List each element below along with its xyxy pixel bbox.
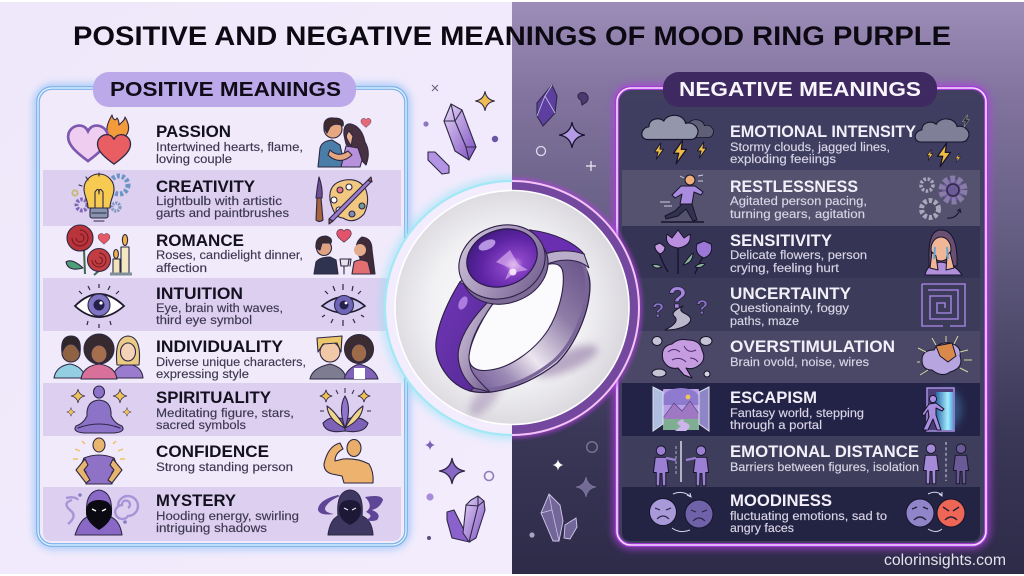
- row: overstimulation: OVERSTIMULATION: [730, 338, 895, 356]
- row: emotional intensity: exploding feeiings: [730, 152, 836, 166]
- icon: sad faces cycling: [650, 492, 713, 532]
- row: uncertainty: [652, 280, 965, 330]
- row: restlessness: Agitated person pacing,: [730, 194, 867, 208]
- row: escapism: Fantasy world, stepping: [730, 406, 864, 420]
- row: escapism: [653, 387, 962, 432]
- row: confidence: Strong standing person: [156, 460, 293, 474]
- icon: couple at candlelight dinner: [314, 229, 375, 274]
- decorations: bottom left crystals and sparkles: [425, 440, 494, 542]
- icon: question marks and foggy path: ?: [668, 280, 687, 315]
- frame highlight: positive: [38, 88, 406, 545]
- row: restlessness: RESTLESSNESS: [730, 178, 858, 196]
- icon: storm clouds and lightning: [642, 115, 714, 164]
- icon: delicate flowers: [652, 230, 712, 274]
- icon: third eye: [75, 284, 124, 328]
- icon: question marks and foggy path: ?: [696, 297, 708, 319]
- band silhouette: [436, 230, 590, 392]
- icon: person crying: [925, 230, 962, 275]
- icon: figures with barrier: [653, 441, 709, 486]
- heading pill: negative meanings: NEGATIVE MEANINGS: [679, 78, 921, 101]
- title: POSITIVE AND NEGATIVE MEANINGS OF MOOD RING PURPLE: [73, 21, 951, 51]
- icon: question marks and foggy path: ?: [652, 300, 664, 322]
- background: left half: [0, 2, 512, 574]
- band highlight: [456, 295, 470, 311]
- icon: separated figures: [923, 442, 969, 484]
- panel: negative meanings: [617, 72, 986, 545]
- row: spirituality: SPIRITUALITY: [156, 389, 271, 407]
- row: restlessness: turning gears, agitation: [730, 207, 865, 221]
- row: passion: PASSION: [156, 123, 231, 141]
- icon: brain with speech bubbles: [652, 336, 712, 378]
- icon: palette and brushes: [316, 177, 372, 224]
- back silver strip: [545, 251, 589, 268]
- row: emotional distance: Barriers between figures, isolation: [730, 460, 919, 474]
- row: intuition: INTUITION: [156, 285, 243, 303]
- icon: intertwined hearts and flame: [68, 115, 131, 164]
- icon: roses and candles: [66, 225, 132, 275]
- icon: maze: [922, 284, 965, 326]
- row bands: positive: [43, 170, 401, 541]
- panel interior: negative: [617, 88, 986, 545]
- frame highlight: negative: [617, 88, 986, 545]
- row: creativity: [72, 173, 372, 224]
- white disc: [395, 190, 629, 424]
- icon: dark hooded figure: [318, 490, 383, 535]
- row bands: negative: [622, 100, 980, 541]
- icon: blonde man and woman: [310, 334, 378, 379]
- front purple band: [436, 282, 490, 391]
- row: individuality: Diverse unique characters,: [156, 355, 306, 369]
- glow: purple right side: [512, 176, 645, 441]
- row: uncertainty: UNCERTAINTY: [730, 285, 851, 303]
- row: overstimulation: [652, 336, 972, 378]
- row: creativity: Lightbulb with artistic: [156, 194, 282, 208]
- medallion backing right: [512, 182, 638, 434]
- row: creativity: garts and paintbrushes: [156, 206, 289, 220]
- row: passion: Intertwined hearts, flame,: [156, 140, 303, 154]
- icon: loving couple: [318, 118, 371, 167]
- frame line left: [384, 180, 512, 436]
- row: spirituality: Meditating figure, stars,: [156, 406, 294, 420]
- icon: meditating figure and stars: [67, 386, 131, 433]
- icon: turning gears: [921, 179, 964, 218]
- row: emotional intensity: [642, 115, 970, 167]
- row: overstimulation: Brain ovold, noise, wires: [730, 355, 869, 369]
- heading pill: positive meanings: [93, 72, 356, 107]
- icon: sad to angry faces: [906, 492, 965, 532]
- ring stone: [448, 213, 558, 316]
- row: intuition: Eye, brain with waves,: [156, 301, 283, 315]
- row: moodiness: angry faces: [730, 521, 794, 535]
- row: intuition: third eye symbol: [156, 313, 252, 327]
- row: romance: affection: [156, 261, 207, 275]
- heading pill: negative meanings: [663, 72, 937, 107]
- frame line: negative: [617, 88, 986, 545]
- decorations: top right crystal and sparkles: [536, 85, 596, 171]
- icon: overloaded brain: [917, 336, 972, 375]
- row: individuality: expressing style: [156, 367, 249, 381]
- row: moodiness: MOODINESS: [730, 492, 832, 510]
- row: emotional intensity: Stormy clouds, jagged lines,: [730, 140, 890, 154]
- ring opening: [469, 264, 563, 370]
- row: moodiness: fluctuating emotions, sad to: [730, 509, 887, 523]
- decorations: top left crystals and sparkles: [423, 85, 498, 174]
- row: emotional distance: [653, 441, 969, 486]
- row: intuition: [75, 284, 365, 328]
- panel frame glow: positive: [38, 88, 406, 545]
- row: spirituality: [67, 386, 371, 433]
- back purple band: [530, 230, 584, 254]
- ring shadow: [464, 339, 601, 421]
- row: sensitivity: SENSITIVITY: [730, 232, 832, 250]
- outer lower rim: [472, 258, 587, 389]
- row: restlessness: [660, 175, 964, 222]
- heading pill: positive meanings: POSITIVE MEANINGS: [110, 78, 341, 101]
- row: uncertainty: paths, maze: [730, 314, 799, 328]
- icon: lightbulb with gears: [72, 173, 128, 221]
- row: emotional distance: EMOTIONAL DISTANCE: [730, 443, 919, 461]
- row: individuality: INDIVIDUALITY: [156, 338, 283, 356]
- panel: positive meanings: [38, 72, 406, 545]
- row: mystery: intriguing shadows: [156, 521, 267, 535]
- row: sensitivity: crying, feeling hurt: [730, 261, 840, 275]
- row: romance: [66, 225, 375, 275]
- source credit: colorinsights.com: [884, 552, 1006, 569]
- icon: fantasy world window: [653, 387, 709, 431]
- row: emotional intensity: EMOTIONAL INTENSITY: [730, 123, 916, 141]
- icon: question marks and foggy path: [652, 280, 708, 330]
- icon: strong standing person: [73, 438, 125, 484]
- icon: hooded figure with swirls: [66, 490, 138, 535]
- ring band: [436, 230, 590, 392]
- row: sensitivity: Delicate flowers, person: [730, 248, 867, 262]
- row: individuality: [54, 334, 378, 381]
- glow: cool left side: [377, 172, 512, 444]
- silver rim: [458, 300, 493, 392]
- row: mystery: [66, 490, 383, 535]
- medallion backing left: [386, 182, 512, 434]
- icon: storm cloud with bolts: [915, 115, 970, 167]
- row: escapism: ESCAPISM: [730, 389, 817, 407]
- icon: lotus and stars: [320, 388, 371, 432]
- decorations: bottom right crystals and sparkles: [529, 442, 597, 541]
- icon: flexing muscular figure: [324, 440, 373, 483]
- row: romance: Roses, candielight dinner,: [156, 248, 303, 262]
- panel frame glow: negative: [617, 88, 986, 545]
- icon: agitated person pacing: [660, 175, 704, 222]
- panel interior: positive: [38, 88, 406, 545]
- row: romance: ROMANCE: [156, 232, 244, 250]
- icon: stepping through portal: [922, 388, 962, 431]
- row: sensitivity: [652, 230, 962, 275]
- icon: eye with rays: [322, 284, 365, 326]
- row: mystery: MYSTERY: [156, 492, 236, 510]
- background: right half: [512, 2, 1024, 574]
- row: escapism: through a portal: [730, 418, 822, 432]
- icon: three diverse characters: [54, 334, 143, 379]
- row: spirituality: sacred symbols: [156, 418, 246, 432]
- ring medallion: [385, 181, 639, 435]
- row: mystery: Hooding energy, swirling: [156, 509, 299, 523]
- row: moodiness: [650, 492, 965, 535]
- row: confidence: [73, 438, 373, 484]
- row: passion: loving couple: [156, 152, 232, 166]
- row: creativity: CREATIVITY: [156, 178, 255, 196]
- frame line right: [512, 180, 640, 436]
- row: uncertainty: Questionainty, foggy: [730, 301, 850, 315]
- row: passion: [68, 115, 371, 167]
- row: confidence: CONFIDENCE: [156, 443, 269, 461]
